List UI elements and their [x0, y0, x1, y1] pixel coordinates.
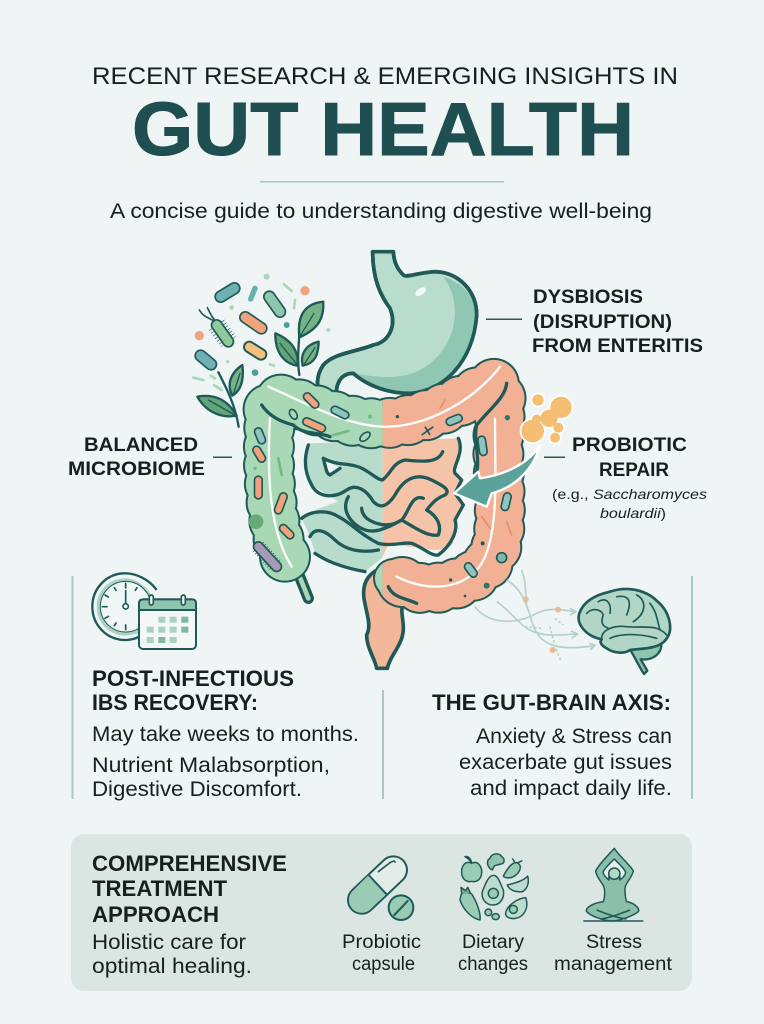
colon highlight lines	[268, 367, 500, 587]
icon labels: capsule	[352, 954, 415, 975]
label: dysbiosis: FROM ENTERITIS	[532, 336, 703, 357]
title: GUT HEALTH	[132, 87, 634, 171]
label: probiotic repair: PROBIOTIC	[572, 435, 687, 456]
icon: dietary changes	[460, 854, 528, 920]
panel body text: optimal healing.	[92, 955, 252, 978]
heading block	[92, 63, 678, 223]
icon labels: Stress	[586, 932, 642, 953]
label: dysbiosis: DYSBIOSIS	[533, 287, 643, 308]
floating microbes and leaves	[193, 284, 295, 390]
text block: the gut-brain axis: and impact daily life.	[470, 777, 672, 800]
text block: the gut-brain axis: THE GUT-BRAIN AXIS:	[432, 690, 671, 715]
text block: the gut-brain axis	[432, 690, 672, 800]
label: dysbiosis: (DISRUPTION)	[533, 312, 672, 333]
text block: post-infectious IBS recovery: May take weeks to months.	[92, 723, 359, 746]
digestive system illustration	[193, 252, 572, 668]
arrow: probiotic repair	[454, 446, 540, 507]
small intestine	[302, 438, 463, 572]
panel body text	[92, 931, 252, 978]
text block: post-infectious IBS recovery: IBS RECOVERY:	[92, 690, 258, 715]
text block: post-infectious IBS recovery: Digestive Discomfort.	[92, 778, 302, 801]
label: probiotic repair	[544, 435, 707, 521]
icon labels: Dietary	[462, 932, 525, 953]
label: balanced microbiome	[68, 435, 232, 480]
panel body text: Holistic care for	[92, 931, 246, 954]
text block: the gut-brain axis: Anxiety & Stress can	[476, 725, 672, 748]
text block: post-infectious IBS recovery	[92, 666, 359, 801]
panel heading: APPROACH	[92, 902, 219, 927]
label: probiotic repair: REPAIR	[599, 460, 669, 481]
label: balanced microbiome: BALANCED	[84, 435, 198, 456]
icon: probiotic capsule	[349, 861, 413, 920]
large intestine	[262, 367, 507, 603]
probiotic yeast cluster	[521, 394, 572, 443]
panel heading: TREATMENT	[92, 876, 228, 901]
icon labels: management	[554, 954, 673, 975]
gut bacteria	[257, 397, 512, 573]
text block: the gut-brain axis: exacerbate gut issues	[459, 751, 672, 774]
icon labels: Probiotic	[342, 932, 421, 953]
rectum	[364, 565, 423, 668]
panel heading	[92, 851, 287, 927]
icon: brain	[579, 589, 670, 674]
panel heading: COMPREHENSIVE	[92, 851, 287, 876]
panel: comprehensive treatment approach	[71, 834, 692, 991]
stomach	[317, 252, 477, 402]
gut-brain nerve connections	[475, 570, 595, 662]
colon folds	[262, 383, 507, 603]
text block: post-infectious IBS recovery: POST-INFECTIOUS	[92, 666, 294, 691]
appendix	[298, 573, 308, 598]
icon labels	[342, 932, 673, 975]
text block: post-infectious IBS recovery: Nutrient Malabsorption,	[92, 754, 330, 777]
icon: stress management person	[583, 848, 643, 921]
label: balanced microbiome: MICROBIOME	[68, 459, 205, 480]
label: dysbiosis	[486, 287, 703, 357]
label: probiotic repair: (e.g., Saccharomyces	[552, 486, 707, 502]
subtitle: A concise guide to understanding digestive well-being	[110, 200, 652, 223]
title kicker: RECENT RESEARCH & EMERGING INSIGHTS IN	[92, 63, 678, 90]
icon: clock and calendar	[92, 573, 196, 649]
panel dividers	[72, 576, 74, 799]
icon labels: changes	[458, 954, 528, 975]
label: probiotic repair: boulardii )	[600, 505, 666, 521]
